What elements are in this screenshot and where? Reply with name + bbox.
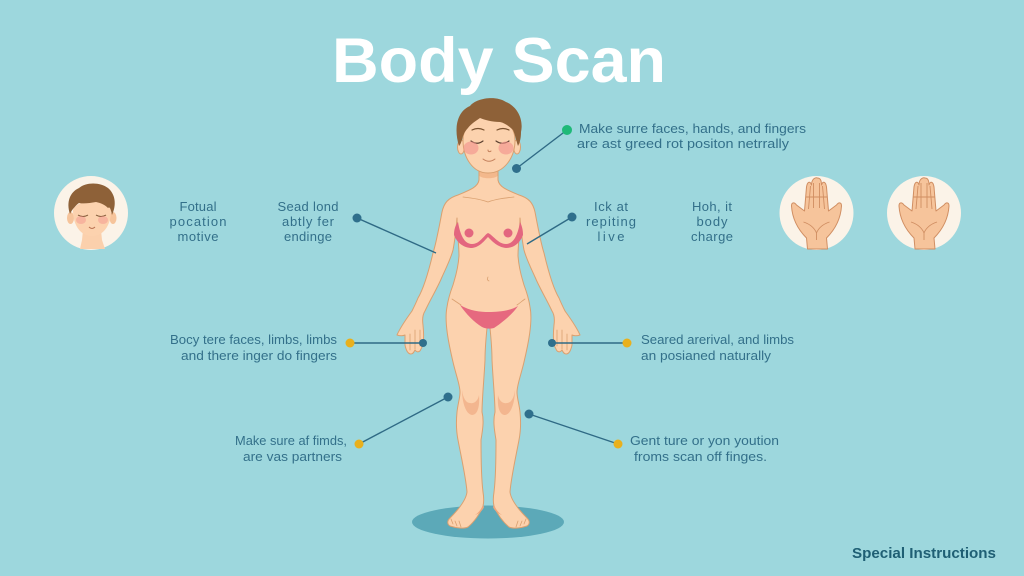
chest dots (464, 228, 512, 238)
nose and mouth (483, 150, 495, 161)
face (463, 112, 515, 173)
title: Body Scan (332, 26, 666, 96)
closed eyes (471, 141, 509, 143)
callout: upper left: abtly fer (282, 214, 335, 229)
navel and hip lines (452, 277, 525, 305)
callout: upper left: Sead lond (278, 199, 338, 214)
icon: hand right (887, 176, 961, 250)
floor shadow ellipse (412, 506, 564, 538)
lower garment (460, 305, 518, 329)
callout: left knee: Make sure af fimds, (235, 433, 347, 448)
callout: left hand: Bocy tere faces, limbs, limbs (170, 332, 338, 347)
finger and toe lines (410, 330, 567, 527)
footer label: Special Instructions (852, 545, 996, 562)
callout: right knee: Gent ture or yon yoution (630, 433, 779, 448)
callout: top right: Make surre faces, hands, and fingers (579, 121, 807, 136)
chest garment (454, 222, 523, 248)
callout: right hand (548, 332, 794, 363)
callout: left hand (170, 332, 427, 363)
callout: upper right: live (598, 229, 624, 244)
text block: far left label: Fotual (180, 199, 217, 214)
callout: right hand: an posianed naturally (641, 348, 772, 363)
text block: far right label (691, 199, 733, 244)
ankle shadows (475, 505, 502, 515)
text block: far left label (170, 199, 226, 244)
neck shadow (480, 170, 498, 178)
callout: top right (512, 121, 807, 173)
callout: upper right: Ick at (594, 199, 628, 214)
callout: left hand: and there inger do fingers (181, 348, 338, 363)
hair (457, 98, 522, 146)
callout: upper left (278, 199, 436, 253)
callout: right hand: Seared arerival, and limbs (641, 332, 794, 347)
eyebrows (472, 128, 509, 130)
icon: face portrait (54, 176, 128, 250)
text block: far left label: motive (178, 229, 218, 244)
text block: far right label: Hoh, it (692, 199, 732, 214)
cheeks (464, 142, 514, 154)
collarbone lines (463, 197, 514, 202)
callout: upper right (527, 199, 636, 244)
body silhouette (397, 168, 580, 528)
ears (458, 140, 520, 154)
human body figure (397, 98, 580, 528)
text block: far right label: body (696, 214, 728, 229)
callout: left knee: are vas partners (243, 449, 343, 464)
callout: upper left: endinge (284, 229, 332, 244)
callout: right knee (524, 410, 779, 464)
callout: top right: are ast greed rot positon netrrally (577, 136, 790, 151)
knee shadows (462, 390, 515, 415)
icon: hand left (780, 176, 854, 250)
callout: upper right: repiting (586, 214, 636, 229)
callout: left knee (235, 392, 452, 464)
callout: right knee: froms scan off finges. (634, 449, 767, 464)
text block: far right label: charge (691, 229, 733, 244)
text block: far left label: pocation (170, 214, 226, 229)
